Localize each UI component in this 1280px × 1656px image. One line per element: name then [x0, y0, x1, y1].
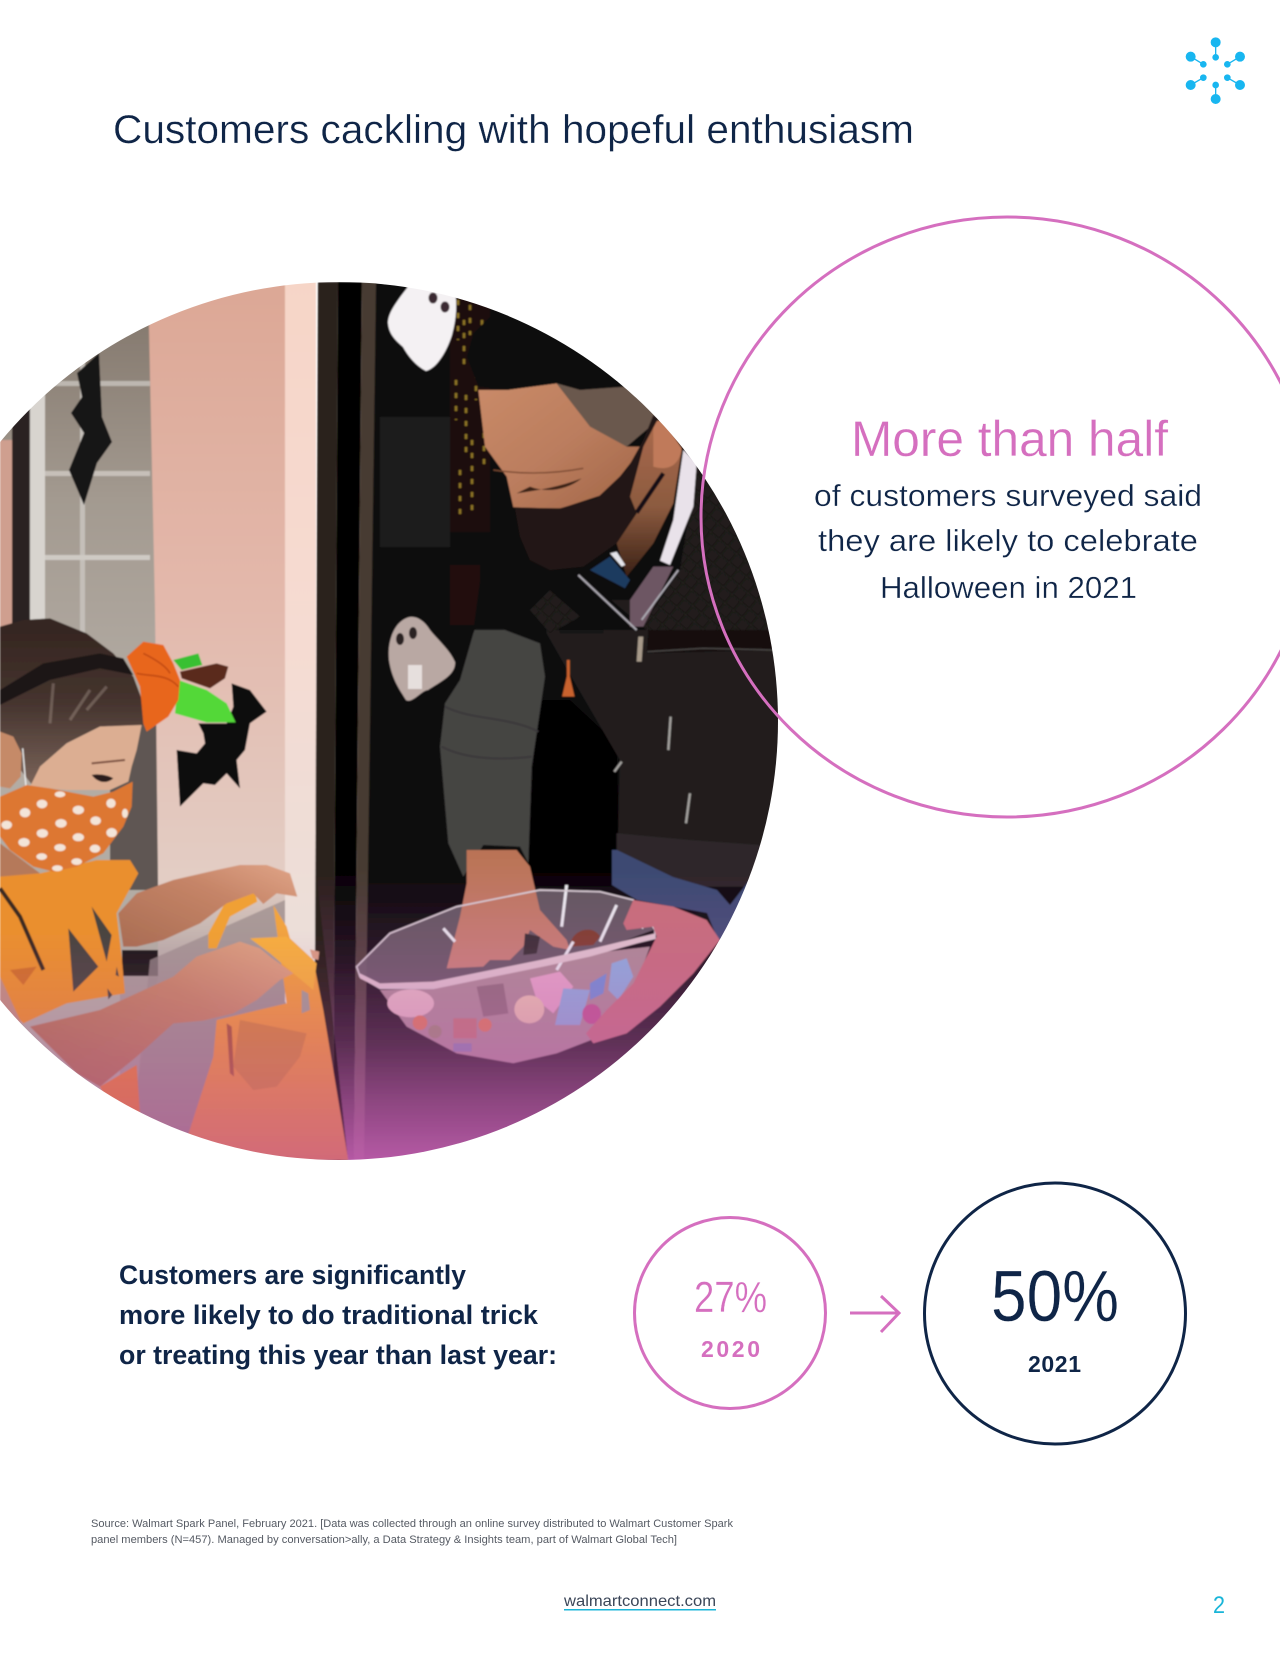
door frame and door — [314, 282, 745, 1160]
man head, mask and collar — [467, 300, 777, 633]
icon: spark logo — [1186, 38, 1244, 103]
trick or treating statement — [119, 1260, 557, 1370]
stat circle: 2021: 50% — [991, 1257, 1119, 1337]
callout: more than half — [814, 411, 1202, 605]
child head with mask and pumpkin hairpiece — [0, 618, 267, 877]
arrow — [850, 1296, 899, 1332]
trick or treating statement: Customers are significantly — [119, 1260, 466, 1290]
pink wall — [130, 282, 316, 1160]
stat circle: 2021 — [924, 1183, 1186, 1444]
callout body text: of customers surveyed said — [814, 478, 1202, 513]
purple gradient overlay on photo — [0, 873, 743, 1160]
child bag background strap and body — [180, 885, 348, 1160]
callout body text: they are likely to celebrate — [818, 523, 1198, 558]
callout body text — [814, 478, 1202, 605]
trick or treating statement: or treating this year than last year: — [119, 1340, 557, 1370]
title: Customers cackling with hopeful enthusiasm — [113, 108, 914, 152]
trick or treating statement: more likely to do traditional trick — [119, 1300, 539, 1330]
child dress and arms — [0, 860, 319, 1113]
stat circle: 2020: 27% — [694, 1273, 767, 1322]
callout circle outline — [701, 217, 1280, 817]
ghost decorations — [388, 284, 456, 701]
source note: Source: Walmart Spark Panel, February 2021. [Data was collected through an online survey distributed to Walmart Customer Spark — [91, 1518, 734, 1530]
candy bowl and hands — [357, 850, 720, 1063]
stat circle: 2020: 2020 — [701, 1336, 760, 1362]
stat circle: 2020 — [634, 1218, 826, 1408]
bat decoration top — [69, 353, 112, 505]
man torso and sleeve — [440, 600, 783, 887]
photo: man handing candy to a child in costume — [0, 282, 806, 1170]
stat circle: 2021: 2021 — [1028, 1351, 1081, 1377]
source note: panel members (N=457). Managed by conversation>ally, a Data Strategy & Insights team, part of Walmart Global Tech] — [91, 1534, 677, 1546]
callout body text: Halloween in 2021 — [880, 570, 1137, 605]
window behind the child — [0, 325, 159, 1091]
page number: 2 — [1213, 1592, 1225, 1619]
man jeans — [610, 848, 748, 942]
source note — [91, 1518, 734, 1546]
footer link: walmartconnect.com — [563, 1593, 716, 1610]
callout heading: More than half — [851, 411, 1168, 467]
